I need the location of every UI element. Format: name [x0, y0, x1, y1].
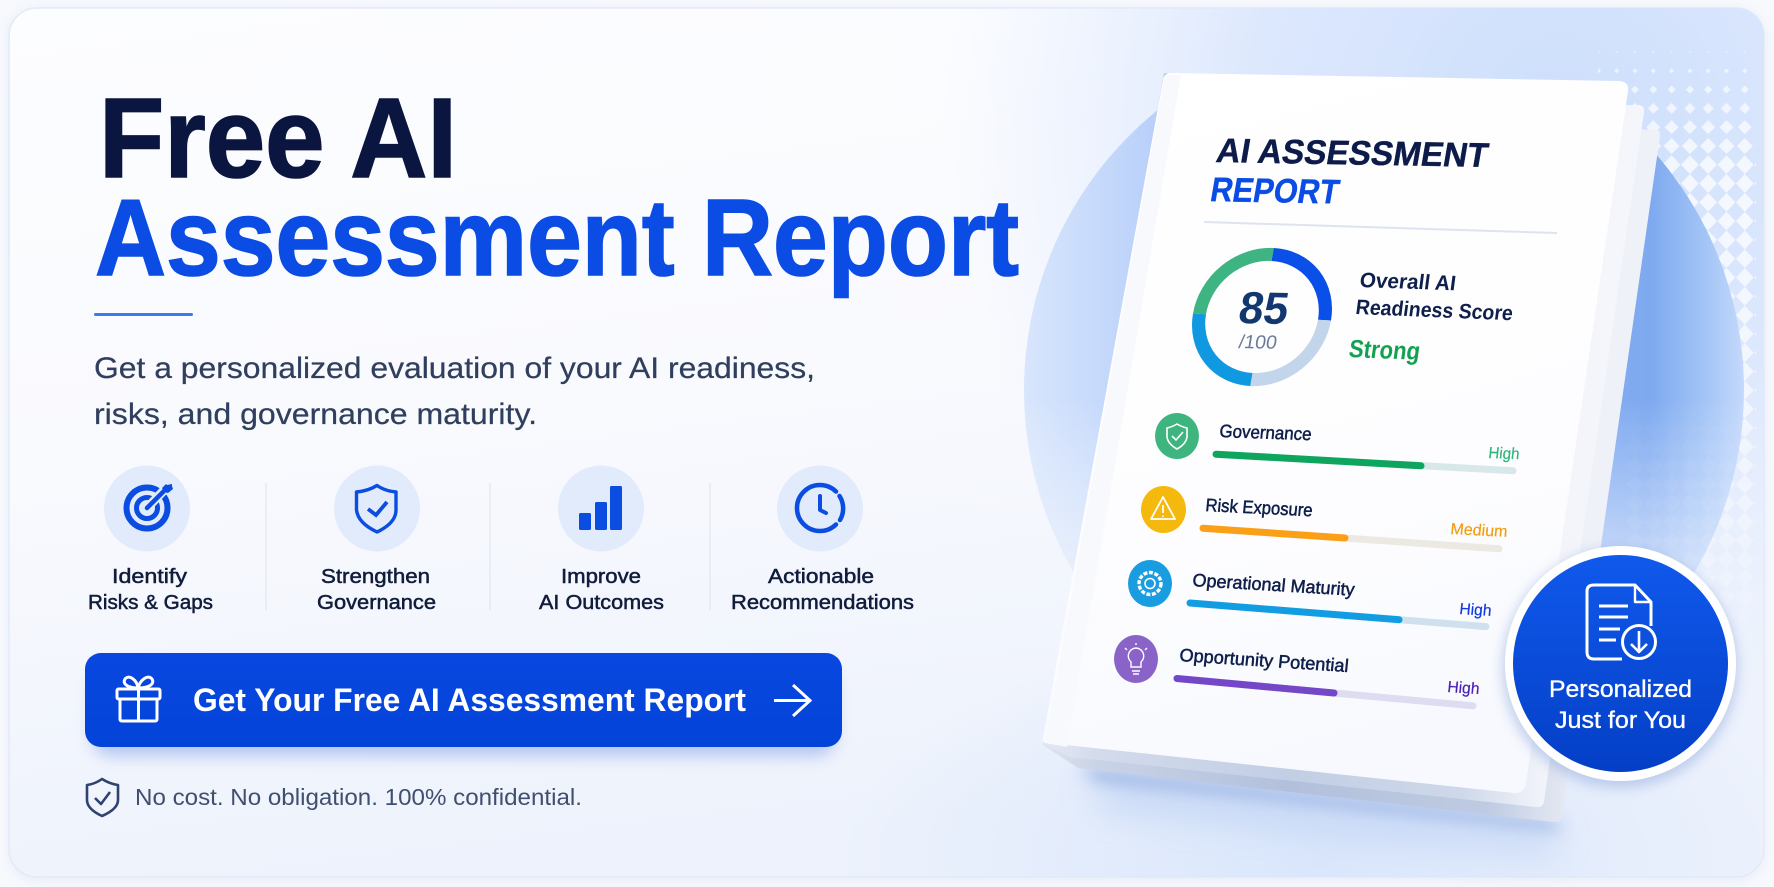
score value: 85 [1235, 282, 1293, 334]
label: AI Outcomes [539, 592, 664, 614]
benefits row [88, 466, 914, 614]
row: operational maturity: High [1459, 600, 1492, 620]
badge text [1549, 676, 1692, 734]
note text: No cost. No obligation. 100% confidential. [135, 784, 582, 810]
score gauge [1189, 251, 1335, 383]
row: risk exposure: Medium [1450, 520, 1508, 541]
report book [1043, 73, 1660, 850]
row: operational maturity [1128, 560, 1492, 627]
subtitle: Get a personalized evaluation of your AI readiness, [94, 352, 815, 385]
label [317, 566, 436, 614]
report heading [1208, 132, 1491, 212]
benefit: strengthen governance [317, 466, 436, 614]
icon: small shield [87, 779, 118, 816]
row: opportunity potential: High [1447, 678, 1480, 698]
label: Risks & Gaps [88, 592, 213, 614]
accent underline [94, 313, 193, 316]
row: risk exposure: Risk Exposure [1205, 495, 1314, 520]
personalized badge [1502, 546, 1738, 788]
row: risk exposure [1141, 486, 1508, 549]
back pages [1043, 73, 1660, 822]
book shadow [1078, 768, 1562, 850]
call to action button [85, 653, 842, 756]
blue background circle [1024, 110, 1744, 572]
title line 1: Free AI [99, 75, 457, 201]
row: opportunity potential: Opportunity Potential [1179, 645, 1350, 676]
button label: Get Your Free AI Assessment Report [193, 682, 746, 718]
row: governance: Governance [1219, 421, 1313, 444]
score value: /100 [1237, 332, 1279, 354]
report heading: AI ASSESSMENT [1214, 132, 1491, 175]
benefit: actionable recommendations [731, 466, 914, 614]
row: governance: High [1488, 444, 1520, 463]
row: opportunity potential [1114, 635, 1480, 706]
row: operational maturity: Operational Maturity [1192, 570, 1356, 600]
icon: target [104, 466, 190, 552]
icon: clock [777, 466, 863, 552]
icon: arrow [774, 685, 810, 716]
icon: warning [1141, 486, 1186, 533]
score caption [1347, 269, 1514, 366]
report heading: REPORT [1208, 171, 1342, 212]
front cover [1043, 73, 1628, 793]
subtitle [94, 352, 815, 431]
icon: light bulb [1114, 635, 1158, 683]
title line 2: Assessment Report [95, 177, 1019, 299]
label: Recommendations [731, 592, 914, 614]
icon: gift [117, 677, 160, 721]
benefit: improve AI outcomes [539, 466, 664, 614]
cover spine band [1045, 75, 1181, 747]
icon: bar chart [558, 466, 644, 552]
score caption: Overall AI [1358, 269, 1457, 295]
icon: shield [334, 466, 420, 552]
benefit: identify risks and gaps [88, 466, 213, 614]
icon: gear [1128, 560, 1172, 607]
badge text: Just for You [1555, 707, 1686, 734]
label [731, 566, 914, 614]
icon: green shield [1155, 413, 1199, 459]
row: governance [1155, 413, 1520, 471]
label: Strengthen [321, 566, 430, 588]
label: Governance [317, 592, 436, 614]
icon: document with download [1587, 585, 1656, 659]
label [539, 566, 664, 614]
subtitle: risks, and governance maturity. [94, 398, 537, 431]
score caption: Strong [1347, 335, 1422, 366]
label: Improve [561, 566, 641, 588]
label: Identify [112, 566, 187, 588]
halftone dots [1598, 50, 1756, 512]
title [95, 75, 1019, 299]
label [88, 566, 213, 614]
label: Actionable [768, 566, 874, 588]
badge text: Personalized [1549, 676, 1692, 703]
score caption: Readiness Score [1354, 296, 1514, 325]
reassurance note [87, 779, 582, 816]
